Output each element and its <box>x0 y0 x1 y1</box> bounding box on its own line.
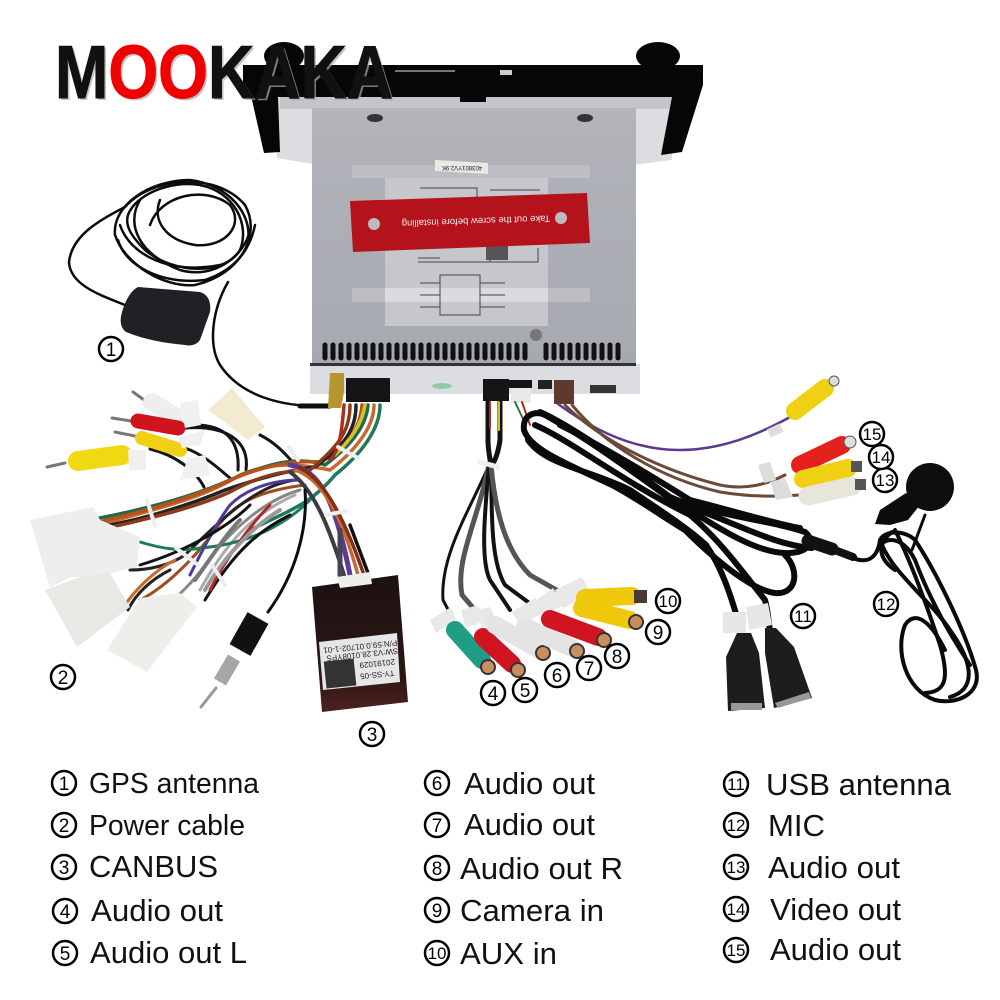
callout 3: 3 <box>367 725 377 746</box>
logo: MOOKAKA: MOOKAKA <box>57 32 395 116</box>
logo: MOOKAKA: MOOKAKA <box>55 30 393 114</box>
plug 15: red <box>800 436 856 465</box>
legend item 15: 15 <box>727 941 745 960</box>
legend item 14: 14 <box>727 900 745 919</box>
connector panel <box>310 364 640 394</box>
rear connector blocks <box>346 378 574 404</box>
legend item 6: 6 <box>432 774 442 795</box>
callout 1: 1 <box>106 340 116 361</box>
yellow RCA plug 2 <box>47 455 122 467</box>
legend item 4: 4 <box>60 902 71 923</box>
small breakout wires <box>490 402 530 430</box>
callout 3 <box>360 722 384 746</box>
item 11: USB antenna cable <box>524 412 853 711</box>
legend item 11: 11 <box>727 775 745 794</box>
legend item 10: AUX in <box>460 936 557 971</box>
legend item 4: Audio out <box>91 893 223 928</box>
item 2: power cable harness <box>30 388 380 707</box>
aerial cable <box>268 490 305 612</box>
wire labels <box>128 400 210 480</box>
white connector 1 <box>30 507 140 587</box>
USB plug left <box>726 633 765 711</box>
legend item 15: Audio out <box>770 932 901 967</box>
silver rear strip <box>280 95 672 109</box>
legend column 1 <box>52 768 259 970</box>
harness wires lower messy <box>125 480 310 610</box>
callout 6: 6 <box>552 666 562 687</box>
legend column 2 <box>425 766 623 971</box>
items 4-10: RCA breakout cables <box>430 402 647 677</box>
legend item 3: CANBUS <box>89 849 218 884</box>
legend item 2: 2 <box>59 816 69 837</box>
legend item 11: USB antenna <box>766 767 952 802</box>
RCA cables <box>150 425 300 487</box>
legend item 3: 3 <box>59 858 69 879</box>
item 1: GPS antenna <box>69 180 330 406</box>
legend item 6: Audio out <box>464 766 595 801</box>
small white sticker: 403801YV2.9K <box>442 164 482 170</box>
brown cables <box>565 405 800 496</box>
callout 12: 12 <box>877 595 895 614</box>
callout 5: 5 <box>520 681 530 702</box>
red RCA plug <box>112 418 178 428</box>
plug 13: white <box>808 479 866 496</box>
legend item 5: 5 <box>60 944 70 965</box>
legend item 9: 9 <box>432 901 442 922</box>
callout 13 <box>873 468 897 492</box>
callout 2 <box>51 665 75 689</box>
legend item 14: Video out <box>770 892 901 927</box>
callout 9: 9 <box>653 623 663 644</box>
legend item 8: Audio out R <box>460 851 623 886</box>
ventilation slots <box>325 345 618 358</box>
legend item 2: Power cable <box>89 810 245 842</box>
legend item 8: 8 <box>432 859 442 880</box>
items 13-15: right RCA cables <box>558 376 866 500</box>
legend item 12: 12 <box>727 816 745 835</box>
callout 15 <box>860 422 884 446</box>
callout 7: 7 <box>584 659 594 680</box>
foam ball <box>906 463 954 511</box>
callout 2: 2 <box>58 668 68 689</box>
metal top plate <box>312 108 636 366</box>
white RCA plug <box>133 392 178 418</box>
cable ties <box>147 447 358 585</box>
white connector 2 <box>45 573 130 647</box>
callout 8: 8 <box>612 647 622 668</box>
legend item 12: MIC <box>768 808 825 843</box>
callout 10 <box>656 589 680 613</box>
screw <box>530 329 542 341</box>
red warning sticker: Take out the screw before installing <box>402 212 550 229</box>
breakout trunk <box>443 402 560 617</box>
legend item 7: 7 <box>432 816 442 837</box>
callout 1 <box>99 337 123 361</box>
CANBUS label: SW:V3.28.0108YPS <box>326 646 398 663</box>
purple cable <box>558 404 790 450</box>
plug 4: teal <box>455 630 495 674</box>
callout 13: 13 <box>876 471 894 490</box>
callout 10: 10 <box>659 592 677 611</box>
plug 14: yellow <box>803 461 862 479</box>
harness wires upper trunk <box>100 405 380 530</box>
CANBUS label: TY-SS-05 <box>359 668 395 681</box>
callout 6 <box>545 663 569 687</box>
callout 11: 11 <box>794 607 812 626</box>
plug 10: yellow <box>585 590 647 603</box>
legend item 1: 1 <box>59 774 69 795</box>
mic clip <box>875 493 920 525</box>
legend item 7: Audio out <box>464 807 595 842</box>
item 3: CANBUS box <box>312 572 408 712</box>
white connector 3 <box>107 593 197 672</box>
CANBUS label: 20191029 <box>359 657 395 670</box>
legend item 13: Audio out <box>768 850 900 885</box>
legend item 1: GPS antenna <box>89 768 259 800</box>
plug 8: red <box>550 619 611 647</box>
side bracket right <box>632 93 674 165</box>
legend item 12 <box>724 808 825 843</box>
red warning sticker <box>350 193 590 252</box>
tan connector <box>208 388 265 440</box>
gold antenna connector <box>328 373 344 408</box>
CANBUS label <box>319 633 400 690</box>
callout 8 <box>605 644 629 668</box>
audio jack <box>808 541 853 557</box>
callout 9 <box>646 620 670 644</box>
callout 5 <box>513 678 537 702</box>
plug 6: white <box>495 625 550 660</box>
diagram number callouts <box>51 337 898 746</box>
plug 7: white <box>525 627 584 658</box>
front bezel <box>243 42 703 155</box>
GPS cable coil <box>69 180 330 406</box>
small white sticker <box>435 160 488 174</box>
legend item 9: Camera in <box>460 893 604 928</box>
legend column 3 <box>724 767 952 967</box>
legend item 10: 10 <box>428 944 446 963</box>
USB cable tags <box>723 603 772 633</box>
plug 9: yellow <box>582 608 643 629</box>
legend item 13: 13 <box>727 858 745 877</box>
callout 14: 14 <box>872 448 890 467</box>
mic cable coil <box>853 515 977 701</box>
plug 5: red <box>483 637 525 677</box>
callout 12 <box>874 592 898 616</box>
wire tags <box>430 577 592 633</box>
CANBUS label: P/N:59.0.01702-1-01 <box>322 638 398 655</box>
callout 4: 4 <box>488 684 499 705</box>
camera RCA plug yellow <box>795 376 839 411</box>
GPS puck <box>121 287 210 345</box>
legend item 5: Audio out L <box>90 935 247 970</box>
callout 15: 15 <box>863 425 881 444</box>
callout 11 <box>791 604 815 628</box>
item 12: microphone <box>853 463 977 701</box>
callout 14 <box>869 445 893 469</box>
callout 7 <box>577 656 601 680</box>
tags <box>758 462 793 500</box>
USB plug right <box>765 628 812 708</box>
side bracket left <box>275 93 318 165</box>
car stereo unit, rear view <box>243 42 703 394</box>
aerial plug <box>201 618 258 707</box>
callout 4 <box>481 681 505 705</box>
harness branch to CANBUS <box>290 465 368 575</box>
wiring diagram paper <box>385 178 548 326</box>
yellow RCA plug 1 <box>115 432 180 450</box>
